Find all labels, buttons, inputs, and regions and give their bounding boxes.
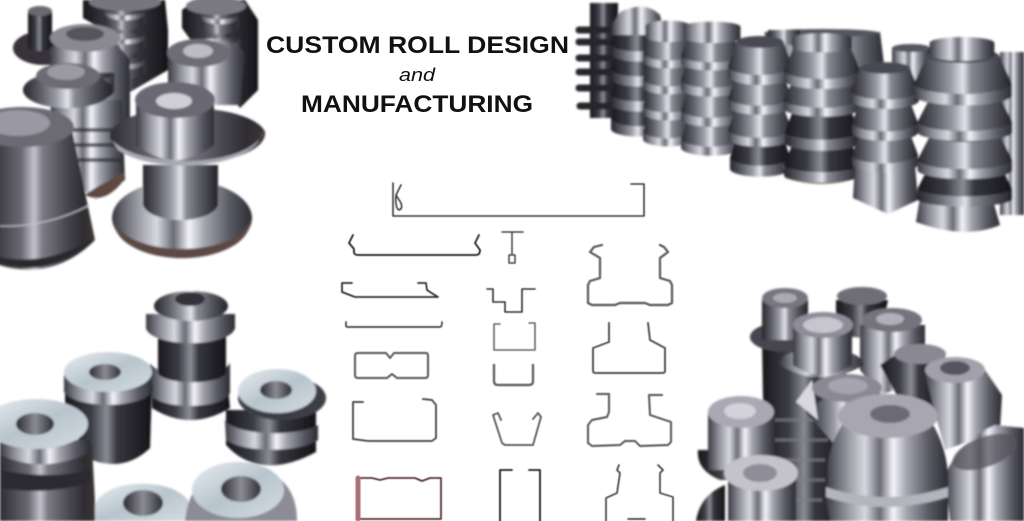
roller: bottom right (185, 462, 297, 521)
roller: back centre (836, 287, 888, 340)
roller: far right cone (925, 357, 1002, 450)
title line: and: and (399, 65, 436, 85)
roller: front left (696, 455, 798, 521)
panel: top-right photo of stacked rollers (579, 3, 1024, 232)
panel: bottom-right photo of roller pile (696, 287, 1024, 521)
roller column: back cluster (764, 29, 884, 70)
roller column 6 (783, 33, 860, 184)
roller: small shaft (13, 6, 75, 65)
roller column 7 (851, 62, 919, 214)
title line: manufacturing: MANUFACTURING (301, 91, 533, 118)
roller: left short (698, 396, 775, 480)
roller: centre cone (796, 374, 882, 445)
profile: red wavy box (358, 478, 441, 519)
profile: stepped hat section (487, 289, 535, 312)
roller column 9, largest (914, 37, 1012, 232)
roller: front upper centre (780, 312, 864, 378)
profile: tall T channel (606, 465, 673, 521)
roller: upper right group (860, 308, 925, 395)
roller: bottom centre (95, 484, 190, 521)
roller: large front left (0, 107, 95, 270)
profile: C section (353, 399, 436, 441)
roller column 2 (611, 7, 665, 137)
roller column 4 (681, 22, 741, 156)
profile: flat strip with upturned ends (346, 322, 442, 327)
roller column: ribbed (579, 3, 618, 118)
roller stack: back centre (83, 0, 168, 92)
dark back block of rollers (762, 340, 850, 521)
roller: large front centre, lower flange (112, 165, 252, 258)
roller: middle left (23, 63, 125, 200)
roller column 8 at far right edge (1000, 52, 1024, 215)
panel: bottom-left photo of polished rollers (0, 291, 326, 521)
roller: large main (826, 394, 948, 521)
roller: large front centre, upper flange and hub (110, 82, 265, 166)
profile: V channel with hooks (493, 413, 541, 445)
panel: top-left photo of steel rollers (0, 0, 265, 270)
roller: tall centre (146, 291, 235, 420)
profile: small channel (494, 323, 535, 350)
roller: far left (0, 399, 96, 521)
profile: small U channel (494, 365, 533, 385)
title block (266, 32, 569, 118)
panel: roll-formed profile drawings (342, 183, 673, 521)
roller: far right lower (945, 425, 1024, 521)
profile: large lipped channel (588, 245, 672, 305)
roller column: back small (892, 44, 930, 100)
profile: closed box with notches (355, 353, 428, 378)
profile: wide deck pan with hook (393, 183, 644, 216)
profile: angled pan (342, 283, 438, 297)
roller: upper right (167, 39, 245, 105)
profile: shallow pan with crimped edges (349, 235, 480, 255)
roller: middle left (64, 352, 153, 464)
roller column 3 (643, 21, 693, 146)
roller: upper centre (50, 24, 130, 130)
profile: tall lipped box (500, 470, 540, 521)
profile: ribbed T channel (588, 394, 671, 446)
title line: custom roll design: CUSTOM ROLL DESIGN (266, 32, 569, 59)
roller stack: back right (182, 0, 258, 108)
profile: T hanger (502, 232, 523, 263)
profile: deep channel (593, 323, 665, 373)
roller: right (225, 369, 326, 465)
roller: back left (750, 288, 820, 352)
roller column 5 (728, 36, 792, 177)
roller: middle right group (880, 344, 946, 410)
